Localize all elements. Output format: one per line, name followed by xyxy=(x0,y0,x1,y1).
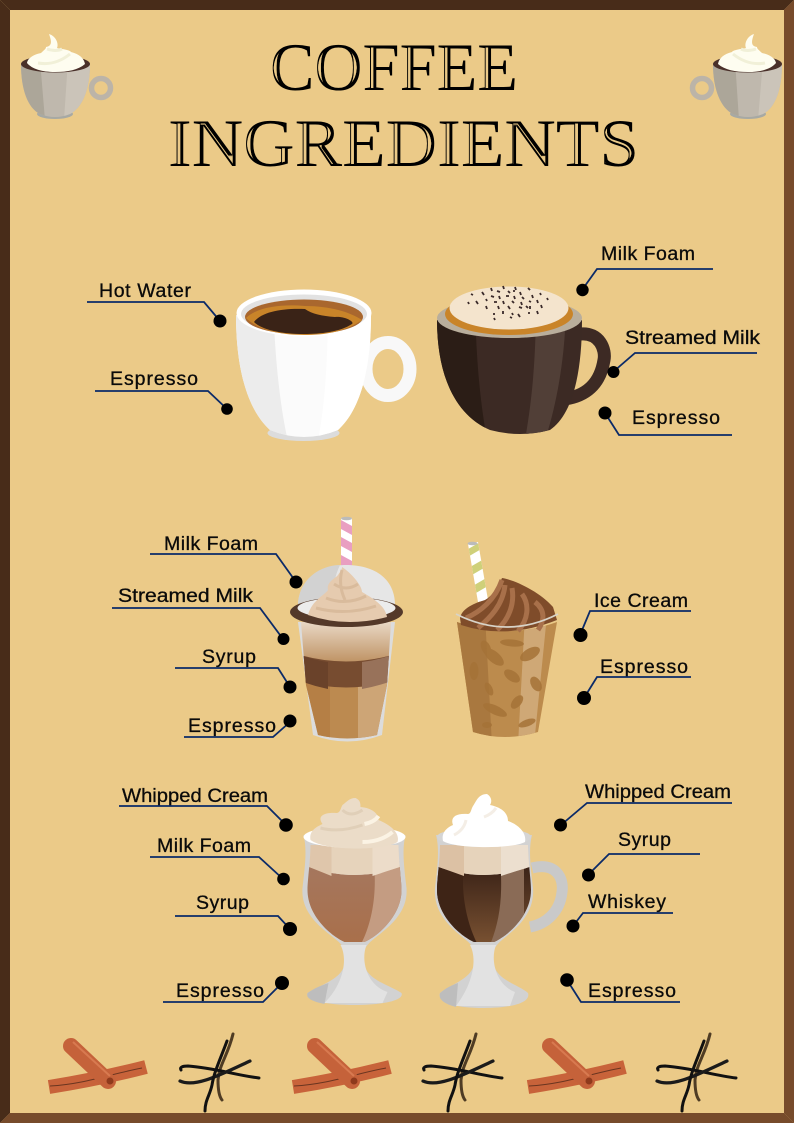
lid ring xyxy=(290,597,403,627)
label: hot water xyxy=(87,280,226,328)
label: syrup left goblet: Syrup xyxy=(196,892,249,914)
label: milk foam goblet: Milk Foam xyxy=(157,835,251,857)
icon: small cup with cream left xyxy=(20,34,110,120)
label: espresso iced chocolate xyxy=(577,656,691,705)
label: espresso iced chocolate: Espresso xyxy=(600,656,688,678)
icon: sprinkles xyxy=(468,286,548,320)
pink straw xyxy=(341,517,352,568)
green straw xyxy=(468,542,488,602)
label: espresso right goblet: Espresso xyxy=(588,980,676,1002)
icon: vanilla pods 2 xyxy=(423,1034,502,1111)
label: syrup right goblet xyxy=(582,829,700,882)
label: milk foam iced latte: Milk Foam xyxy=(164,533,258,555)
label: milk foam iced latte xyxy=(150,533,302,588)
label: syrup iced latte: Syrup xyxy=(202,646,256,668)
label: espresso left goblet: Espresso xyxy=(176,980,264,1002)
label: whipped cream left goblet: Whipped Cream xyxy=(122,785,268,807)
dome xyxy=(298,565,395,604)
label: whipped cream right goblet: Whipped Cream xyxy=(585,781,731,803)
icon: cinnamon sticks 1 xyxy=(49,1042,146,1087)
white espresso cup xyxy=(230,290,410,450)
glass xyxy=(298,622,395,742)
label: syrup left goblet xyxy=(175,892,297,936)
white whipped cream xyxy=(443,794,525,847)
title xyxy=(168,29,639,181)
label: milk foam cappuccino xyxy=(576,243,713,296)
title: INGREDIENTS xyxy=(168,105,639,181)
label: hot water: Hot Water xyxy=(99,280,192,302)
label: streamed milk iced latte xyxy=(112,585,290,645)
cream swirl xyxy=(308,567,387,622)
icon: small cup with cream right xyxy=(692,34,783,120)
label: streamed milk cappuccino xyxy=(608,327,760,378)
icon: vanilla pods 1 xyxy=(180,1034,259,1111)
label: espresso iced latte: Espresso xyxy=(188,715,276,737)
iced chocolate drink xyxy=(450,542,558,745)
label: syrup iced latte xyxy=(175,646,296,694)
label: espresso left goblet xyxy=(163,976,289,1002)
icon: cinnamon sticks 3 xyxy=(528,1042,625,1087)
iced latte with dome lid xyxy=(290,517,403,742)
label: espresso cappuccino xyxy=(598,406,732,435)
icon: vanilla pods 3 xyxy=(657,1034,736,1111)
glass rim xyxy=(456,614,558,627)
label: whipped cream right goblet xyxy=(554,781,732,832)
label: streamed milk cappuccino: Streamed Milk xyxy=(625,327,760,349)
label: syrup right goblet: Syrup xyxy=(618,829,671,851)
label: espresso americano: Espresso xyxy=(110,368,198,390)
chocolate swirl xyxy=(460,578,557,631)
coffee blobs xyxy=(486,640,542,728)
dark cappuccino cup xyxy=(430,286,604,440)
beige whipped cream xyxy=(310,798,398,849)
icon: cinnamon sticks 2 xyxy=(293,1042,390,1087)
cup body xyxy=(457,622,557,737)
label: espresso cappuccino: Espresso xyxy=(632,407,720,429)
irish cream goblet with milk foam xyxy=(302,798,407,1005)
irish coffee goblet with whiskey xyxy=(435,794,562,1008)
label: milk foam cappuccino: Milk Foam xyxy=(601,243,695,265)
label: espresso americano xyxy=(95,368,233,415)
label: milk foam goblet xyxy=(150,835,290,885)
label: whipped cream left goblet xyxy=(119,785,293,832)
title: COFFEE xyxy=(270,29,518,105)
label: whiskey xyxy=(566,891,673,932)
label: ice cream: Ice Cream xyxy=(594,590,688,612)
label: streamed milk iced latte: Streamed Milk xyxy=(118,585,253,607)
label: whiskey: Whiskey xyxy=(588,891,666,913)
label: espresso right goblet xyxy=(560,973,680,1002)
label: ice cream xyxy=(574,590,691,642)
